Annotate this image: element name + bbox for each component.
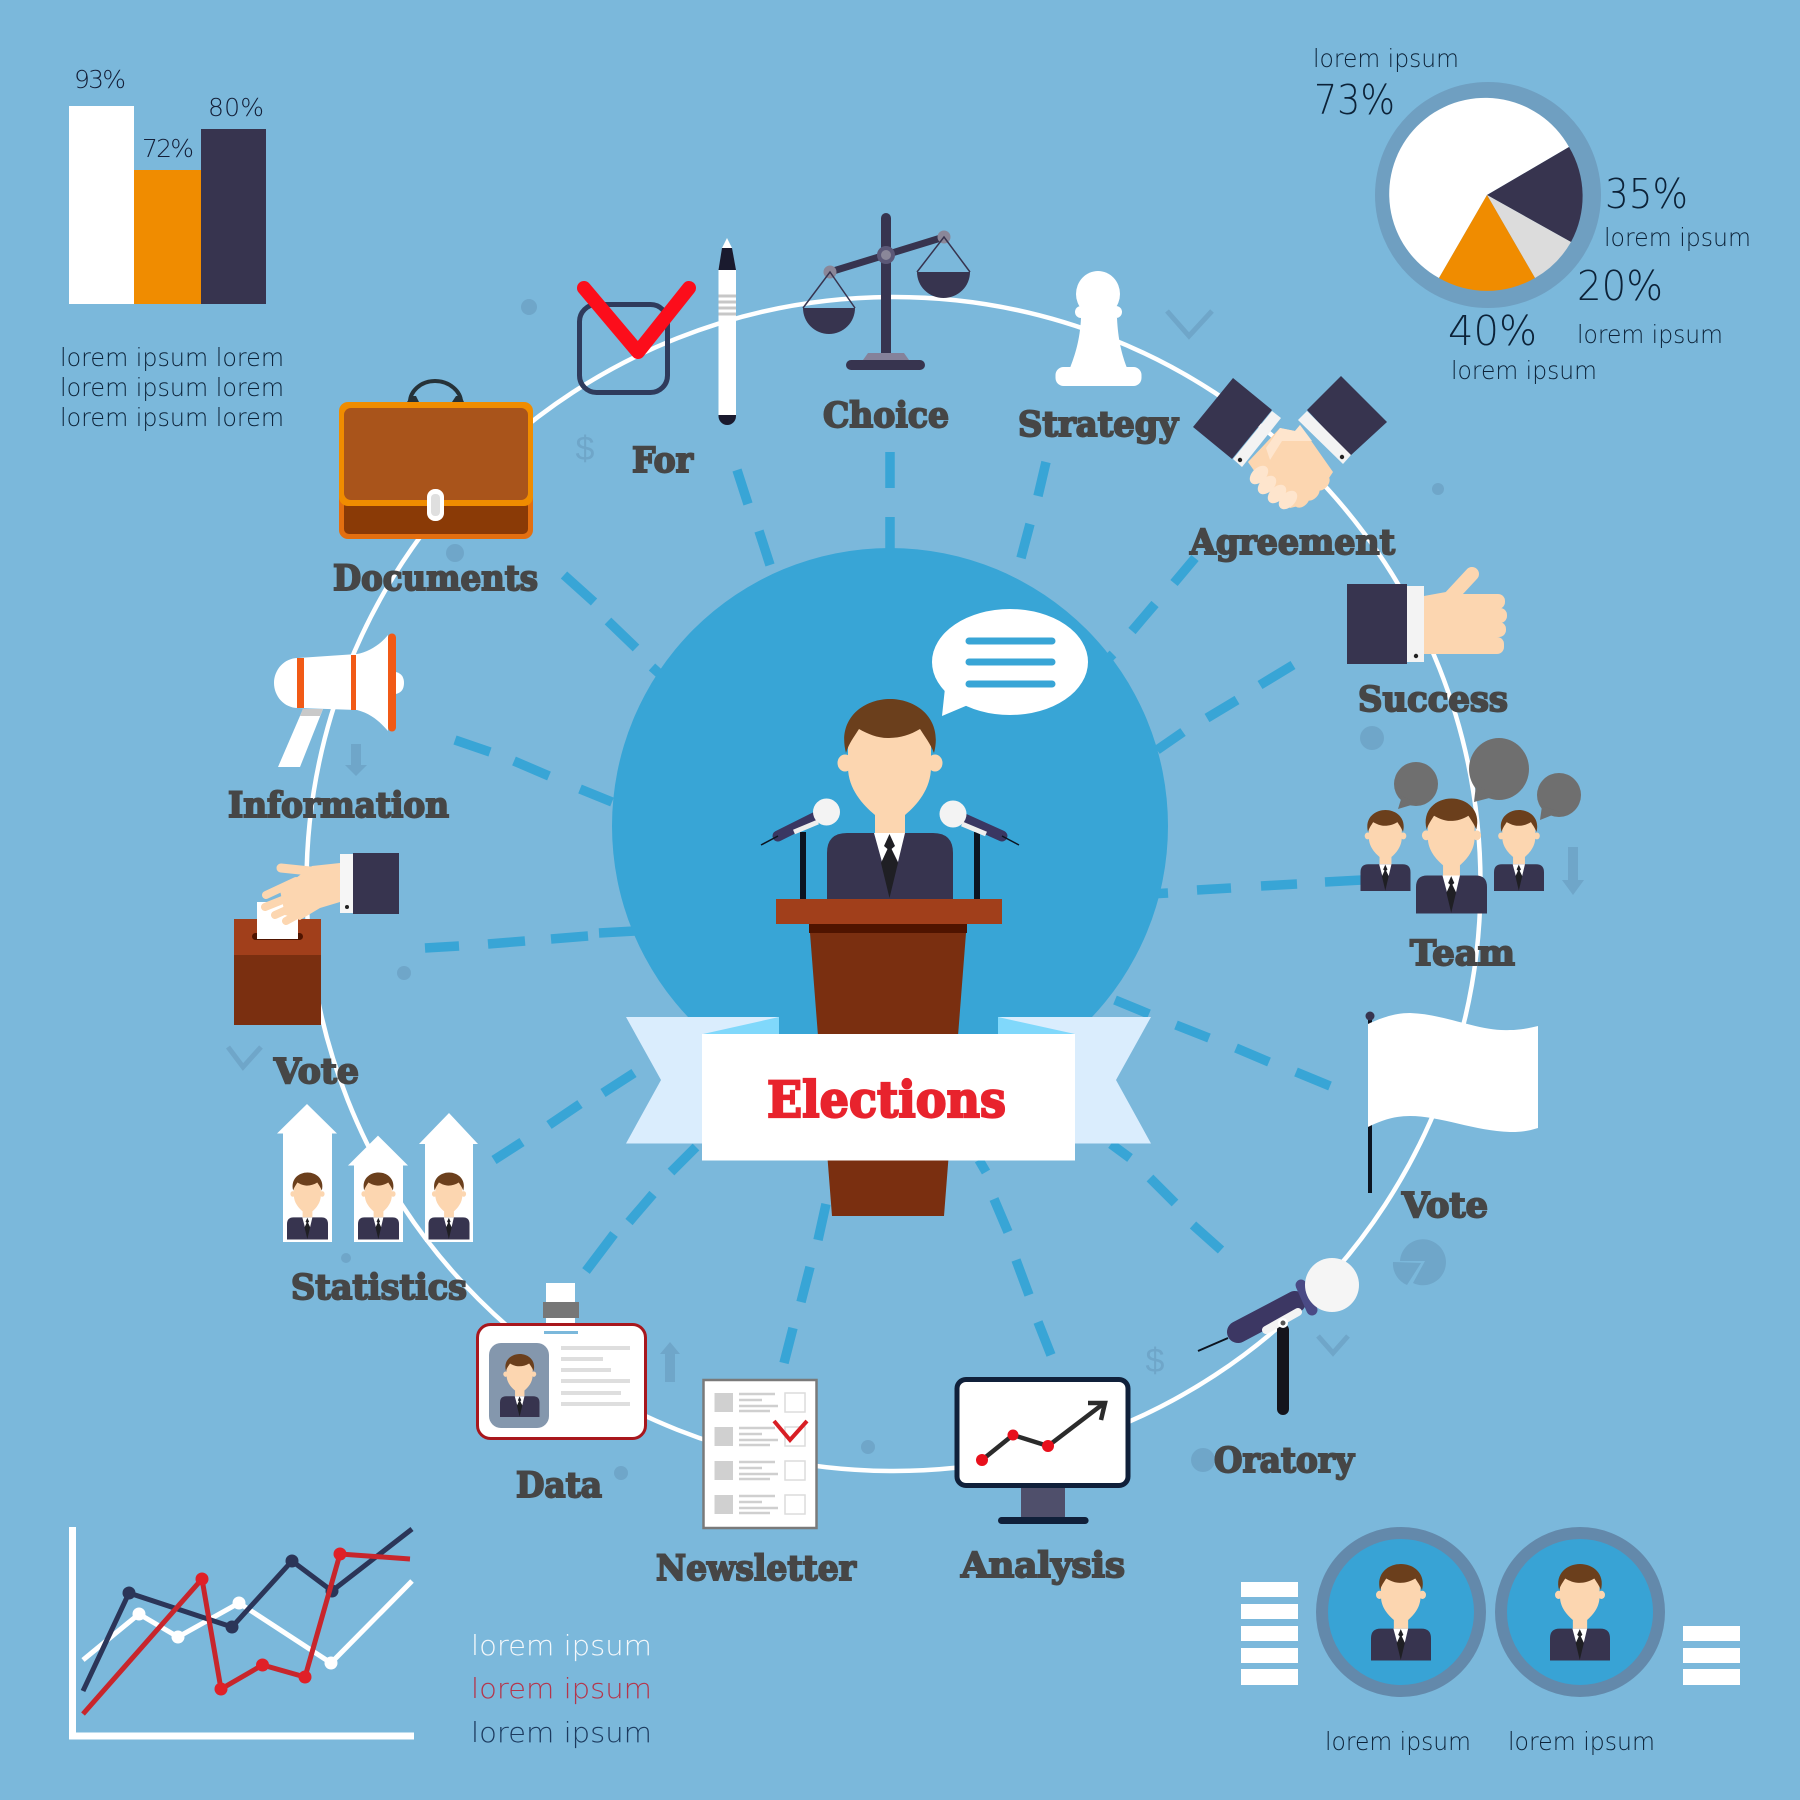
icon: scales (803, 213, 970, 370)
label: Data (516, 1465, 602, 1506)
candidates comparison (1241, 1533, 1740, 1756)
pie labels: lorem ipsum (1313, 44, 1459, 73)
bar values: 80% (208, 93, 264, 122)
bar values: 72% (142, 134, 194, 163)
item: oratory (1198, 1258, 1359, 1481)
ghost background icons: $ (576, 430, 595, 468)
candidate one (1322, 1533, 1480, 1756)
pie labels: lorem ipsum (1604, 223, 1751, 252)
axes (72, 1527, 414, 1736)
right microphone (940, 800, 1019, 899)
ghost background icons: $ (1146, 1342, 1165, 1380)
label: Vote (273, 1051, 359, 1092)
central blue circle (612, 548, 1168, 1104)
item: for (580, 238, 736, 481)
item: newsletter (656, 1380, 857, 1589)
label: Documents (333, 558, 538, 599)
right stacked bars (1683, 1626, 1740, 1685)
item: vote ballot (234, 853, 399, 1092)
item: documents (333, 381, 538, 599)
white ring (306, 297, 1480, 1471)
speaker at podium (761, 699, 1019, 1216)
bar values: 93% (74, 65, 126, 94)
pie labels: 20% (1577, 262, 1663, 310)
label: Team (1410, 933, 1515, 974)
line chart legend: lorem ipsum (471, 1716, 652, 1749)
item: analysis (957, 1380, 1128, 1586)
label: Vote (1401, 1185, 1488, 1226)
pie labels: 73% (1314, 76, 1395, 124)
bar chart (60, 65, 284, 432)
speech bubble (932, 609, 1088, 716)
pie labels: 35% (1605, 170, 1688, 218)
icon: megaphone (274, 634, 404, 767)
icon: briefcase (339, 381, 533, 539)
label: Newsletter (656, 1548, 857, 1589)
bar chart caption: lorem ipsum lorem (60, 373, 284, 402)
item: choice (803, 213, 970, 436)
bar values (74, 65, 264, 163)
left microphone (761, 798, 840, 899)
icon: microphone (1198, 1258, 1359, 1409)
dashed spokes (425, 452, 1362, 1363)
candidate one: lorem ipsum (1325, 1727, 1471, 1756)
icon: pawn (1056, 271, 1142, 386)
item: vote flag (1366, 1012, 1538, 1226)
item: information (228, 634, 449, 826)
item: statistics (277, 1104, 478, 1308)
icon: checklist (704, 1380, 816, 1528)
icon: speech bubbles (1394, 738, 1581, 820)
icon: flag (1366, 1012, 1538, 1193)
icon: arrows with candidates (277, 1104, 478, 1242)
item: agreement (1189, 376, 1395, 563)
item: success (1347, 574, 1508, 720)
red series (83, 1548, 410, 1714)
candidate two: lorem ipsum (1508, 1727, 1655, 1756)
pie labels (1313, 44, 1751, 385)
bar chart caption: lorem ipsum lorem (60, 343, 284, 372)
icon: ballot box (234, 902, 321, 1025)
icon: thumbs up (1347, 574, 1507, 664)
pie chart (1375, 82, 1601, 308)
label: Choice (823, 395, 949, 436)
pie labels: 40% (1448, 307, 1537, 355)
navy series (83, 1529, 412, 1691)
label: Success (1358, 679, 1508, 720)
item: strategy (1018, 271, 1180, 445)
icon: handshake (1193, 376, 1387, 513)
line chart legend: lorem ipsum (471, 1629, 652, 1662)
line chart legend: lorem ipsum (471, 1672, 652, 1705)
left stacked bars (1241, 1582, 1298, 1685)
line chart legend (471, 1629, 652, 1749)
label: Information (228, 785, 449, 826)
label: Strategy (1018, 404, 1180, 445)
icon: checkbox (580, 288, 689, 392)
item: data (478, 1283, 646, 1506)
label: Agreement (1189, 522, 1395, 563)
icon: monitor (957, 1380, 1128, 1524)
ghost background icons (228, 299, 1584, 1480)
icon: pen (718, 238, 736, 425)
speaker figure (827, 699, 953, 899)
bar chart caption: lorem ipsum lorem (60, 403, 284, 432)
icon: three men (1360, 798, 1544, 914)
white series (83, 1581, 412, 1670)
label: Analysis (960, 1545, 1125, 1586)
icon: id badge (478, 1283, 646, 1438)
bar chart caption (60, 343, 284, 432)
pie labels: lorem ipsum (1451, 356, 1597, 385)
item: team (1360, 738, 1581, 974)
line chart (72, 1527, 414, 1736)
label: For (632, 440, 694, 481)
icon: hand with sleeve (265, 853, 399, 921)
label: Statistics (291, 1267, 467, 1308)
candidate two (1501, 1533, 1659, 1756)
title: Elections (767, 1070, 1006, 1129)
banner (626, 1017, 1151, 1160)
podium (776, 899, 1002, 1216)
label: Oratory (1214, 1440, 1356, 1481)
pie labels: lorem ipsum (1577, 320, 1723, 349)
